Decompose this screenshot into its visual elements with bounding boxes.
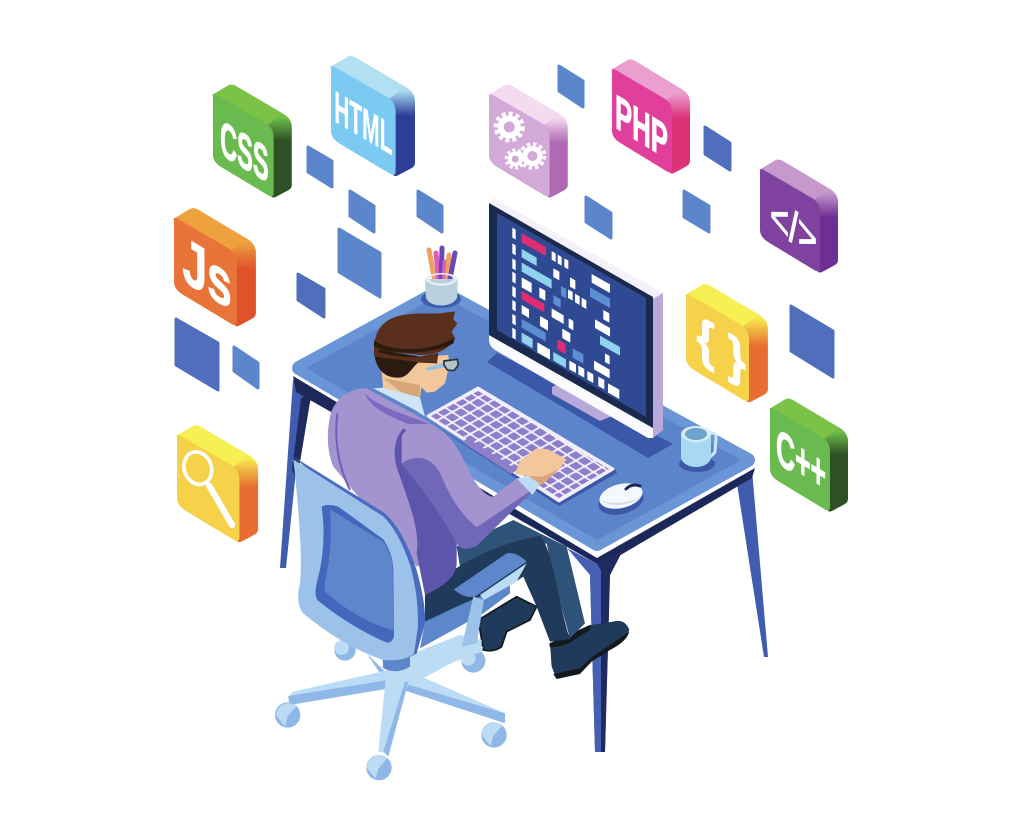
shirt collar [373, 388, 425, 417]
monitor shadow [487, 353, 673, 458]
gas column [383, 654, 410, 671]
tile: PHP [611, 59, 690, 174]
monitor top highlight and chin [489, 198, 663, 299]
face [415, 355, 449, 393]
label: C++: C++ [776, 417, 826, 504]
trousers and shoes [425, 520, 629, 679]
monitor stand [552, 384, 612, 421]
office chair [275, 457, 527, 780]
desk right leg [737, 470, 768, 657]
armrest [454, 553, 527, 647]
neck [382, 363, 422, 398]
label: PHP: PHP [615, 85, 668, 171]
tile: HTML [330, 56, 415, 176]
floating blue squares [176, 66, 833, 390]
desk [293, 291, 755, 752]
glasses [425, 359, 458, 371]
tile: Js [173, 208, 256, 326]
label: braces: { } [696, 306, 746, 393]
pens [429, 248, 455, 284]
tile: C++ [769, 398, 848, 512]
hand [515, 448, 567, 485]
sleeve shading [402, 458, 533, 549]
far trouser leg [457, 520, 585, 638]
front casters [275, 702, 507, 780]
tile: CSS: CSS [220, 109, 269, 194]
tile: curly braces [685, 284, 768, 402]
tile: search [176, 425, 258, 542]
tile: CSS [212, 84, 292, 198]
far shoe [478, 597, 537, 651]
near shoe [550, 621, 629, 679]
pencil cup [421, 248, 461, 308]
mouse [596, 479, 646, 519]
hair [374, 312, 457, 355]
tile: HTML: HTML [334, 82, 392, 166]
arm shadow [395, 428, 460, 595]
jacket back [328, 388, 433, 567]
coffee mug [679, 426, 716, 472]
suit jacket, shirt, head [328, 312, 567, 595]
monitor [487, 198, 673, 458]
developer figure [328, 312, 629, 679]
seat [420, 583, 510, 648]
tile: code brackets [759, 160, 838, 272]
tile: gears [488, 84, 568, 198]
monitor bezel [489, 203, 653, 428]
sleeve [402, 424, 533, 548]
far casters [334, 639, 485, 673]
label: code tag: </> [770, 188, 817, 267]
near trouser leg [425, 536, 570, 642]
keyboard [426, 388, 617, 506]
screen code blocks [512, 228, 620, 399]
desk front leg [567, 548, 622, 752]
star base [288, 647, 505, 757]
monitor side [653, 293, 663, 438]
icon: gears [496, 114, 545, 168]
backrest [293, 457, 425, 660]
label: Js: Js [182, 222, 232, 324]
screen [497, 213, 646, 417]
desk back-left leg [280, 380, 313, 568]
icon: magnifying glass [179, 448, 232, 525]
shirt cuff [517, 477, 540, 495]
